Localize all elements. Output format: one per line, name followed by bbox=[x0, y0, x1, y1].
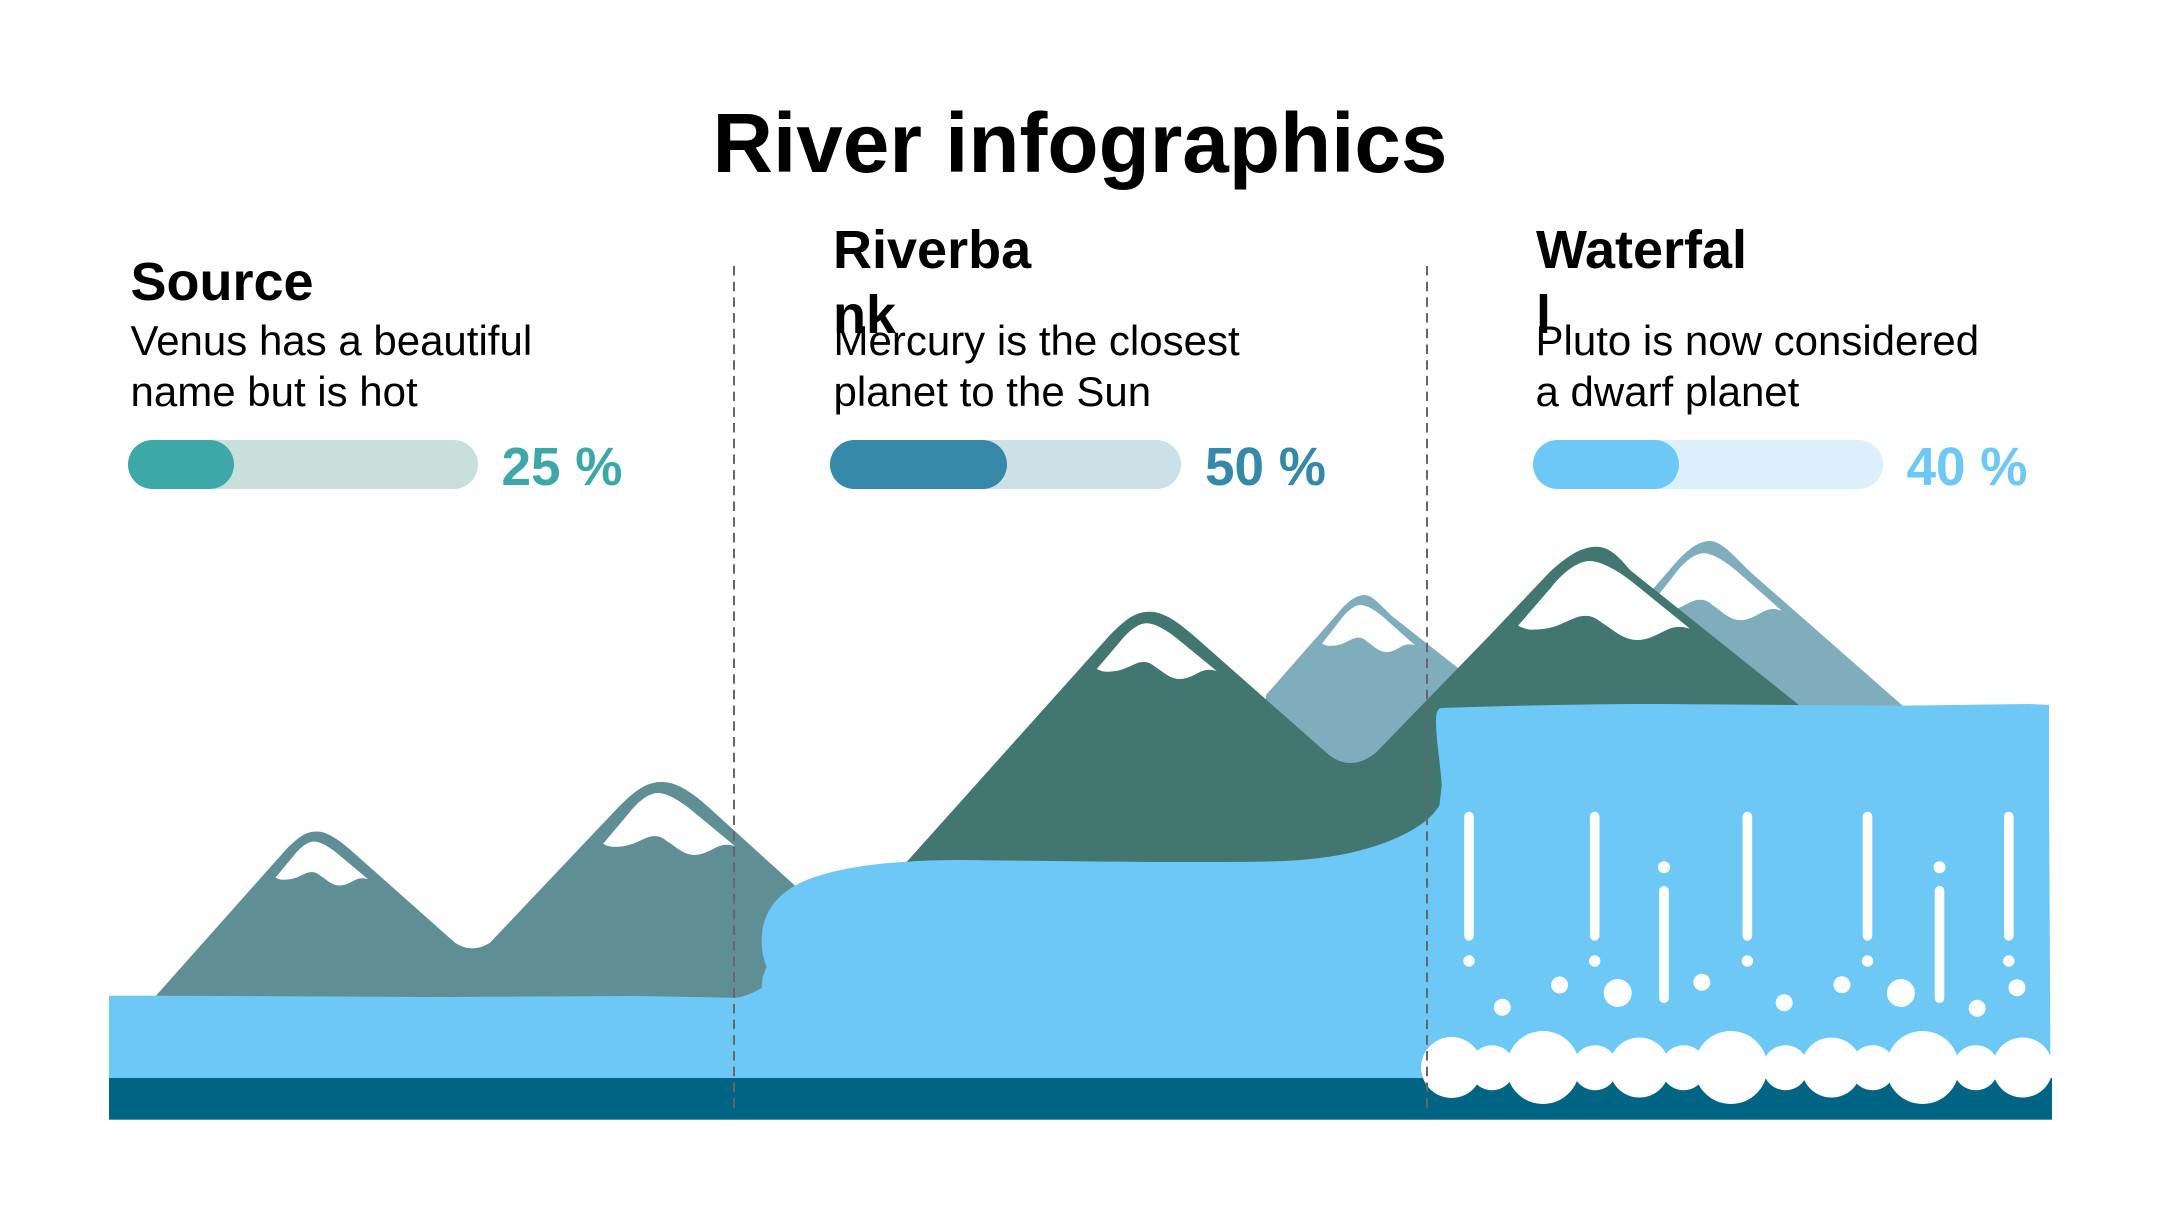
value: 40%: 40 % bbox=[1906, 437, 2028, 497]
icon: snow cap right bbox=[1518, 561, 1690, 640]
heading: source: Source bbox=[130, 252, 314, 312]
divider: source / riverbank bbox=[733, 266, 735, 1111]
title: River infographics bbox=[712, 96, 1448, 190]
text: riverbank description: planet to the Sun bbox=[834, 368, 1151, 415]
heading: waterfall: Waterfal bbox=[1536, 220, 1747, 280]
text: waterfall description: a dwarf planet bbox=[1536, 368, 1800, 415]
illustration: front mountains bbox=[903, 547, 1799, 880]
value: 25%: 25 % bbox=[502, 437, 622, 497]
icon: snow cap bbox=[1648, 553, 1782, 620]
text: waterfall description: Pluto is now considered bbox=[1536, 317, 1979, 364]
panel: waterfall bbox=[1533, 220, 2028, 497]
progress bar: source 25% bbox=[128, 440, 478, 489]
riverbed bbox=[109, 1078, 2052, 1120]
panel: riverbank bbox=[830, 220, 1326, 497]
value: 50%: 50 % bbox=[1205, 437, 1326, 497]
icon: snow cap bbox=[1322, 605, 1415, 652]
illustration: back mountain, waterfall bbox=[1600, 541, 1903, 730]
river bbox=[109, 704, 2050, 1078]
icon: snow cap left bbox=[1097, 623, 1217, 679]
illustration: back mountain, riverbank bbox=[1260, 595, 1458, 780]
heading: riverbank: Riverba bbox=[833, 220, 1031, 280]
panel: source bbox=[128, 252, 622, 497]
text: source description: name but is hot bbox=[130, 368, 418, 415]
divider: riverbank / waterfall bbox=[1426, 266, 1428, 1111]
waterfall foam bbox=[1421, 1031, 2053, 1104]
text: riverbank description: Mercury is the closest bbox=[834, 317, 1240, 364]
heading: waterfall: l bbox=[1536, 285, 1551, 345]
waterfall streaks and droplets bbox=[1463, 812, 2026, 1017]
icon: snow cap 2 bbox=[603, 793, 735, 855]
progress bar: riverbank 50% bbox=[830, 440, 1181, 489]
icon: snow cap 1 bbox=[276, 842, 368, 886]
heading: riverbank: nk bbox=[833, 285, 897, 345]
progress bar: waterfall 40% bbox=[1533, 440, 1883, 489]
text: source description: Venus has a beautiful bbox=[130, 317, 532, 364]
illustration: source mountains bbox=[156, 782, 800, 1000]
